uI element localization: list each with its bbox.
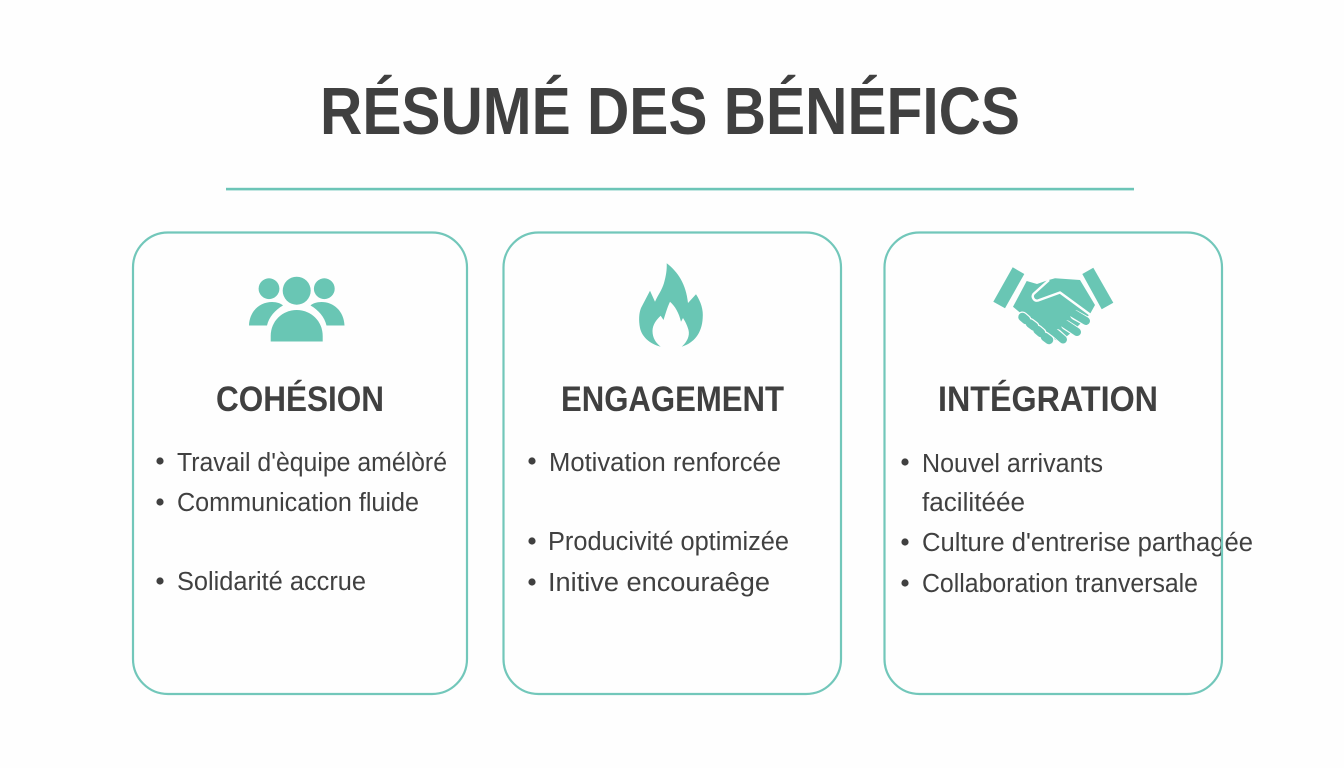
list: engagement benefits: Motivation renforcée	[549, 449, 781, 477]
list: engagement benefits: Initive encouraêge	[548, 569, 770, 597]
heading: cohésion: COHÉSION	[216, 379, 384, 419]
list: intégration benefits: Nouvel arrivants	[922, 450, 1103, 478]
list: cohésion benefits	[156, 449, 447, 596]
panel: cohésion	[133, 232, 467, 694]
title: RÉSUMÉ DES BÉNÉFICS	[320, 74, 1020, 149]
list: engagement benefits	[528, 449, 789, 597]
list: intégration benefits: Culture d'entrerise parthagée	[922, 529, 1253, 557]
list: cohésion benefits: Solidarité accrue	[177, 568, 366, 596]
list: intégration benefits: Collaboration tranversale	[922, 570, 1198, 598]
icon: handshake	[993, 267, 1113, 342]
panel: engagement	[504, 232, 841, 694]
heading: intégration: INTÉGRATION	[938, 379, 1158, 419]
list: engagement benefits: Producivité optimizée	[548, 528, 789, 556]
panel: intégration	[884, 232, 1253, 694]
list: cohésion benefits: Communication fluide	[177, 489, 419, 517]
icon: group of people	[249, 277, 344, 342]
list: intégration benefits	[901, 450, 1253, 598]
list: cohésion benefits: Travail d'èquipe amélòré	[177, 449, 447, 477]
list: intégration benefits: facilitéée	[922, 489, 1025, 517]
heading: engagement: ENGAGEMENT	[561, 380, 784, 419]
icon: flame	[639, 263, 703, 347]
